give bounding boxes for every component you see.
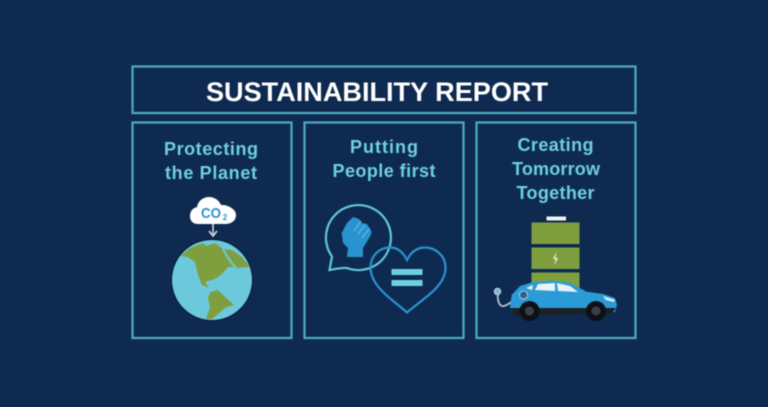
heading: protecting the planet: Protecting [164,139,258,159]
icon: electric car with charging cable [494,281,617,321]
heading: putting people first: Putting [350,137,418,157]
heading: creating tomorrow together [512,135,601,203]
icon: speech bubble [326,205,391,270]
north america [181,243,250,288]
icon: raised fist [342,217,372,257]
south america [206,290,234,319]
heading: creating tomorrow together: Together [516,183,594,203]
heading: creating tomorrow together: Tomorrow [512,159,601,179]
panel: putting people first [304,122,464,338]
panel: protecting the planet [132,122,292,338]
icon: co2 cloud with arrow: CO [201,205,221,222]
title banner [132,66,636,113]
heading: creating tomorrow together: Creating [518,135,594,155]
icon: co2 cloud with arrow: 2 [223,213,228,222]
icon: battery [532,216,580,292]
panel: creating tomorrow together [476,122,636,338]
heading: protecting the planet [164,139,258,183]
hudson channel [223,249,236,268]
title banner: SUSTAINABILITY REPORT [206,77,548,107]
heading: protecting the planet: the Planet [165,163,257,183]
heading: putting people first [332,137,436,181]
heading: putting people first: People first [332,161,436,181]
icon: globe [170,238,254,322]
icon: heart with equals sign [370,248,446,312]
icon: co2 cloud with arrow [190,197,236,236]
